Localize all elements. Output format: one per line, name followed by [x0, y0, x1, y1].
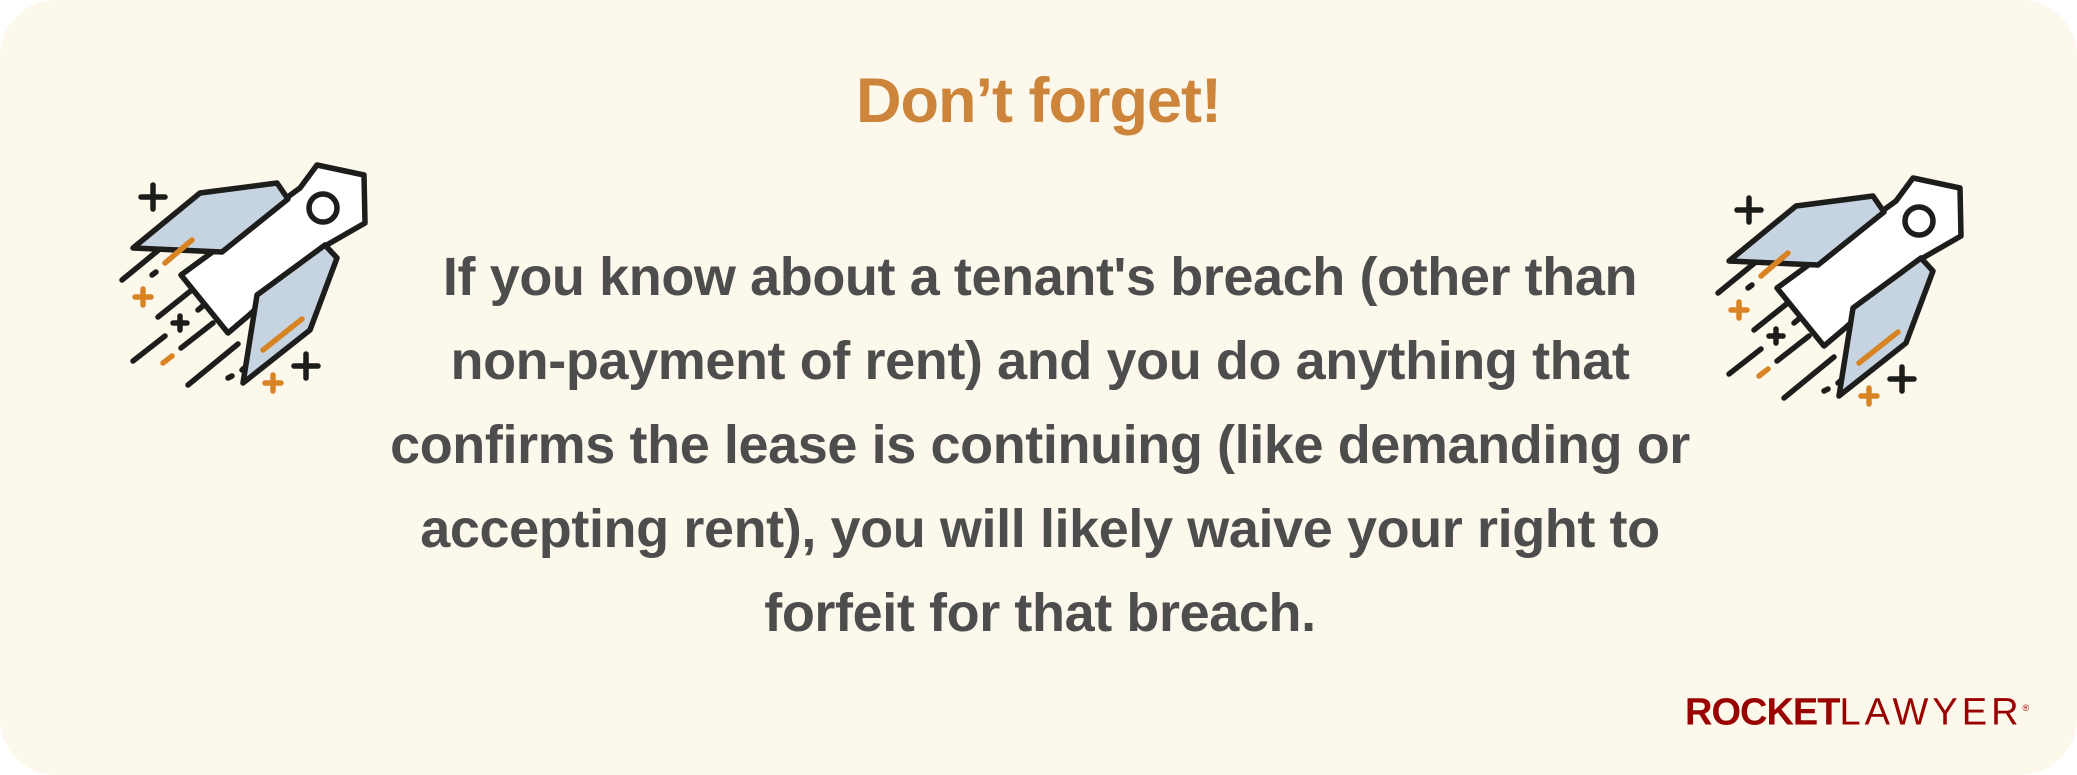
logo: Rocket Lawyer: ROCKETLAWYER®: [1685, 692, 2029, 734]
icon: rocket left: [119, 162, 368, 394]
title: Don’t forget!: [856, 66, 1221, 136]
text block: warning: non-payment of rent) and you do anything that: [451, 331, 1629, 391]
text block: warning: accepting rent), you will likely waive your right to: [420, 499, 1660, 559]
text block: warning: If you know about a tenant's breach (other than: [443, 247, 1637, 307]
icon: rocket right: [1715, 175, 1964, 407]
text block: warning: [390, 247, 1690, 643]
text block: warning: confirms the lease is continuing (like demanding or: [390, 415, 1690, 475]
text block: warning: forfeit for that breach.: [764, 583, 1316, 643]
